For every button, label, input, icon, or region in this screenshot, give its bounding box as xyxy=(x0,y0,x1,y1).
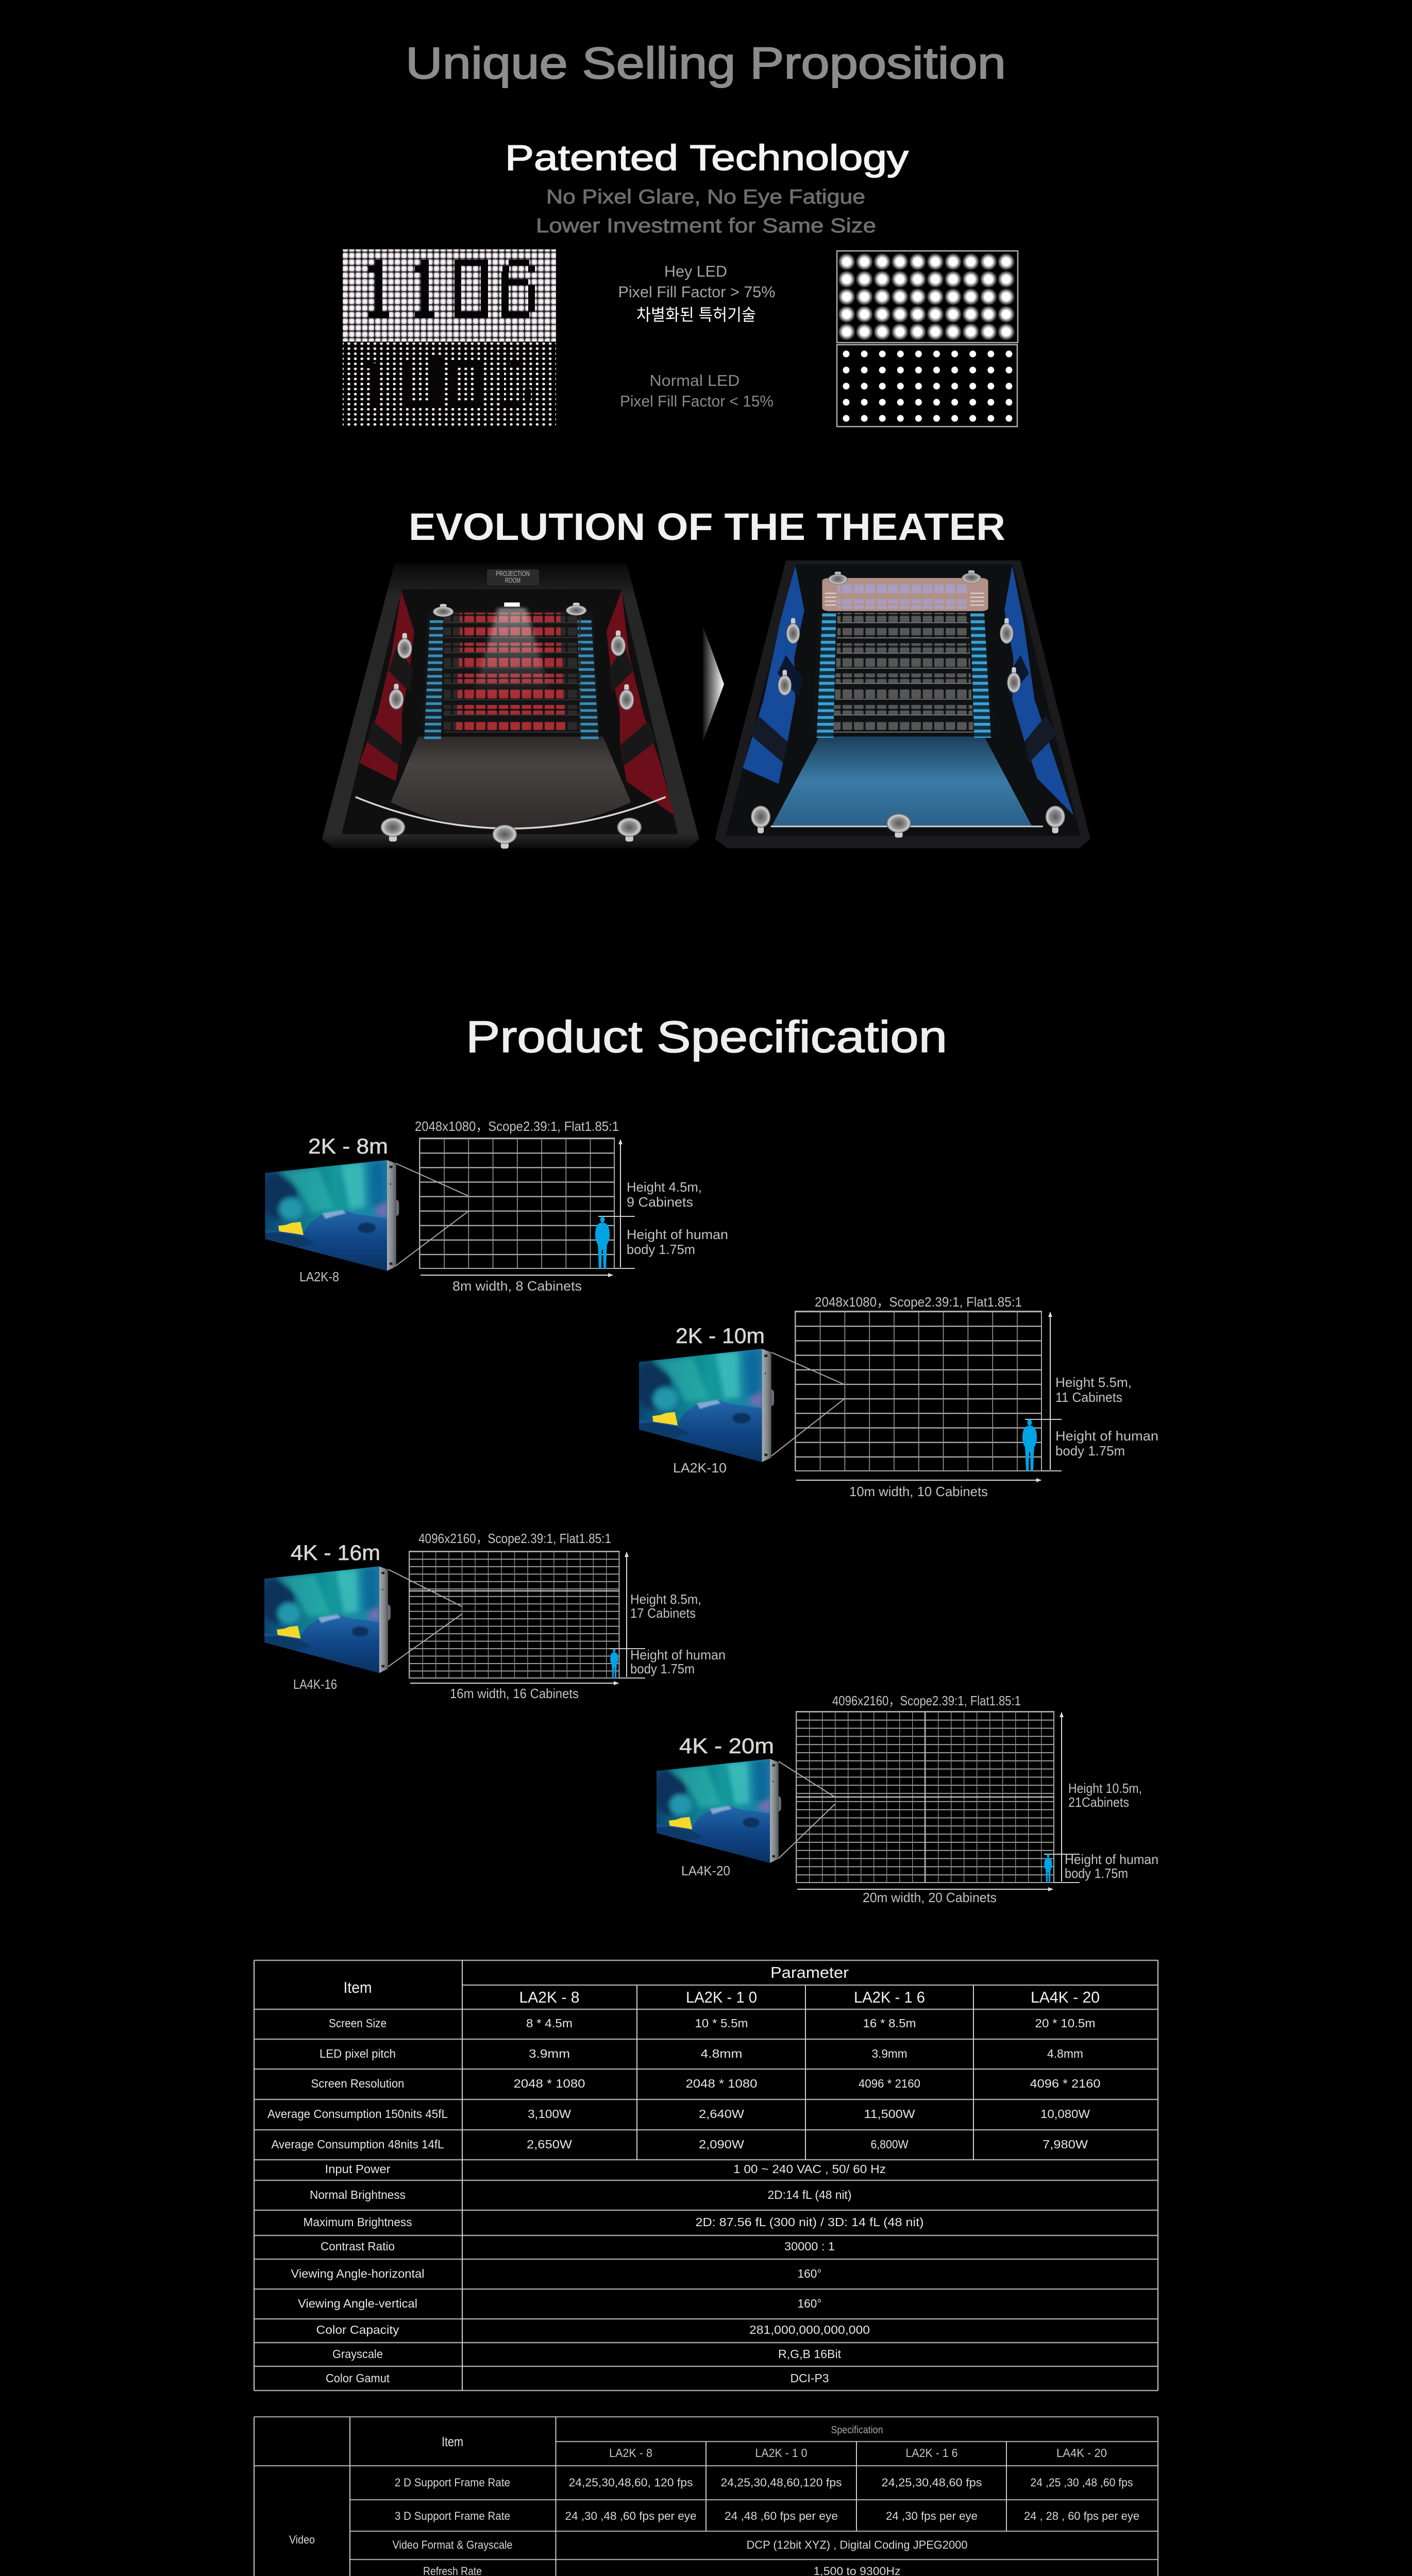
Normal LED caption: Normal LED xyxy=(649,371,740,389)
dimension labels: 10m width, 10 Cabinets xyxy=(849,1484,988,1499)
row: viewing angle horizontal: 160° xyxy=(798,2267,821,2280)
cabinet screen image xyxy=(260,1154,399,1278)
aisle steps xyxy=(817,613,836,738)
row: resolution: 2048 * 1080 xyxy=(513,2077,585,2090)
Hey LED caption: Hey LED xyxy=(664,262,727,280)
dimension labels: Height 10.5m, xyxy=(1068,1781,1142,1796)
projection room label: PROJECTION xyxy=(496,569,530,578)
seat rows xyxy=(833,613,973,732)
cabinet screen image xyxy=(634,1343,774,1469)
dimension labels: Height 8.5m, xyxy=(630,1591,701,1607)
row: consumption 150 nits xyxy=(267,2107,1090,2121)
pixel diagram: Normal LED xyxy=(837,345,1018,427)
row: consumption 150 nits: Average Consumption 150nits 45fL xyxy=(267,2107,448,2121)
curved screen xyxy=(356,797,666,828)
dimension labels: body 1.75m xyxy=(1055,1443,1125,1459)
projection room label: ROOM xyxy=(505,576,520,584)
row: consumption 48 nits xyxy=(271,2138,1088,2151)
table: parameter specification xyxy=(254,1960,1158,2391)
cabinet grid xyxy=(796,1711,1054,1883)
dimension labels xyxy=(681,1781,1158,1905)
row: screen size: 8 * 4.5m xyxy=(526,2016,573,2030)
spec diagram: 2K - 10m xyxy=(634,1294,1158,1499)
row: consumption 48 nits: Average Consumption 48nits 14fL xyxy=(271,2138,444,2151)
dimension labels: 11 Cabinets xyxy=(1055,1389,1122,1405)
model title: 2K - 10m xyxy=(676,1324,765,1348)
row: color capacity xyxy=(316,2323,870,2336)
row: refresh rate xyxy=(423,2565,901,2576)
row: viewing angle vertical: 160° xyxy=(798,2297,821,2310)
dimension labels: 8m width, 8 Cabinets xyxy=(452,1278,582,1294)
model title: 2K - 8m xyxy=(308,1134,388,1158)
row: 3D frame rate: 24 ,30 ,48 ,60 fps per eye xyxy=(565,2510,697,2522)
row: color gamut: DCI-P3 xyxy=(791,2371,829,2385)
row: consumption 48 nits: 2,650W xyxy=(527,2138,572,2151)
projector beam xyxy=(473,608,551,697)
cabinet screen image xyxy=(260,1561,391,1680)
row: screen size: 16 * 8.5m xyxy=(863,2016,916,2030)
row: consumption 150 nits: 11,500W xyxy=(864,2107,915,2121)
header row: LA2K - 1 6 xyxy=(906,2446,957,2460)
row: color capacity: 281,000,000,000,000 xyxy=(749,2323,870,2336)
speakers xyxy=(381,603,642,849)
dimension labels xyxy=(673,1375,1158,1499)
cabinet grid xyxy=(795,1311,1041,1471)
row: 3D frame rate: 24 ,48 ,60 fps per eye xyxy=(725,2510,838,2522)
resolution label: 2048x1080，Scope2.39:1, Flat1.85:1 xyxy=(815,1294,1022,1310)
Hey LED caption: 차별화된 특허기술 xyxy=(636,306,756,324)
row: viewing angle horizontal xyxy=(291,2267,821,2280)
dimension arrows xyxy=(410,1552,627,1683)
header row: Item xyxy=(442,2434,463,2449)
row: viewing angle horizontal: Viewing Angle-horizontal xyxy=(291,2267,425,2280)
dimension labels: Height 4.5m, xyxy=(627,1179,702,1195)
projection room label xyxy=(487,569,539,585)
dimension labels: body 1.75m xyxy=(627,1242,695,1257)
seating block xyxy=(811,613,995,734)
row: color capacity: Color Capacity xyxy=(316,2323,399,2336)
callout lines xyxy=(771,1352,845,1456)
table rules xyxy=(254,2417,1158,2576)
dimension arrows xyxy=(797,1713,1062,1889)
row: normal brightness: Normal Brightness xyxy=(310,2188,406,2201)
dimension labels: 9 Cabinets xyxy=(627,1194,693,1210)
title: Unique Selling Proposition: Unique Selling Proposition xyxy=(406,39,1006,88)
aisle steps xyxy=(424,620,443,739)
dimension labels xyxy=(299,1179,728,1294)
resolution label: 4096x2160，Scope2.39:1, Flat1.85:1 xyxy=(832,1693,1021,1708)
header row: LA2K - 1 6 xyxy=(854,1988,925,2006)
human figure xyxy=(1044,1854,1052,1883)
row: grayscale: R,G,B 16Bit xyxy=(778,2347,842,2361)
dimension labels: 16m width, 16 Cabinets xyxy=(450,1686,579,1701)
Hey LED caption xyxy=(618,262,775,324)
row: grayscale xyxy=(332,2347,842,2361)
digits on Hey LED panel xyxy=(368,260,535,318)
row: resolution: 4096 * 2160 xyxy=(859,2077,920,2090)
row: video format: Video Format & Grayscale xyxy=(393,2538,512,2551)
row: maximum brightness: Maximum Brightness xyxy=(303,2215,412,2229)
digits on Normal LED panel xyxy=(363,355,531,407)
spec diagram: 4K - 16m xyxy=(260,1531,726,1701)
LED photo comparison xyxy=(343,249,556,428)
row: resolution xyxy=(311,2077,1101,2090)
dimension labels: LA2K-8 xyxy=(299,1269,339,1284)
row: 2D frame rate: 24 ,25 ,30 ,48 ,60 fps xyxy=(1031,2476,1133,2489)
callout lines xyxy=(388,1569,462,1667)
row: screen size: 10 * 5.5m xyxy=(695,2016,748,2030)
callout lines xyxy=(396,1163,469,1266)
row: input power: Input Power xyxy=(325,2162,391,2176)
dimension arrows xyxy=(421,1140,620,1275)
row: pixel pitch: 4.8mm xyxy=(1047,2047,1083,2060)
row: resolution: Screen Resolution xyxy=(311,2077,404,2090)
header row xyxy=(343,1963,1100,2006)
dimension arrows xyxy=(796,1312,1050,1480)
model title: 4K - 16m xyxy=(291,1540,380,1565)
table rules xyxy=(254,1960,1158,2391)
human figure xyxy=(1022,1419,1037,1471)
row: consumption 48 nits: 7,980W xyxy=(1043,2138,1088,2151)
dimension labels: Height of human xyxy=(627,1227,728,1242)
cabinet grid xyxy=(409,1551,619,1678)
header row: LA4K - 20 xyxy=(1056,2446,1107,2460)
floor xyxy=(391,737,631,830)
row: resolution: 2048 * 1080 xyxy=(685,2077,758,2090)
seat rows xyxy=(444,613,581,732)
dimension labels: LA4K-20 xyxy=(681,1863,730,1878)
row: 3D frame rate: 24 , 28 , 60 fps per eye xyxy=(1024,2510,1139,2522)
row: resolution: 4096 * 2160 xyxy=(1030,2077,1101,2090)
row: consumption 48 nits: 2,090W xyxy=(699,2138,744,2151)
dimension labels: 20m width, 20 Cabinets xyxy=(863,1890,997,1905)
subheading: benefits: Lower Investment for Same Size xyxy=(536,215,876,237)
row: video format xyxy=(393,2538,968,2551)
resolution label: 2048x1080，Scope2.39:1, Flat1.85:1 xyxy=(415,1118,619,1134)
heading: Evolution of the theater: EVOLUTION OF THE THEATER xyxy=(409,505,1005,548)
row: viewing angle vertical xyxy=(298,2297,821,2310)
theater: projection layout xyxy=(322,563,699,849)
row: 3D frame rate: 3 D Support Frame Rate xyxy=(395,2510,510,2522)
cabinet screen image xyxy=(652,1753,781,1869)
projector xyxy=(504,602,520,607)
dimension labels: Height 5.5m, xyxy=(1055,1375,1132,1390)
spec diagram: 4K - 20m xyxy=(652,1693,1158,1905)
row: screen size xyxy=(329,2016,1096,2030)
header row: LA2K - 8 xyxy=(609,2446,652,2460)
spec diagram: 2K - 8m xyxy=(260,1118,728,1294)
LED screen highlight overlay xyxy=(822,578,988,611)
header row: LA2K - 1 0 xyxy=(686,1988,757,2006)
speakers xyxy=(751,570,1065,838)
row: pixel pitch: 3.9mm xyxy=(872,2047,907,2060)
dimension labels: LA2K-10 xyxy=(673,1460,727,1476)
row: 2D frame rate: 2 D Support Frame Rate xyxy=(395,2476,510,2489)
row: video format: DCP (12bit XYZ) , Digital Coding JPEG2000 xyxy=(746,2538,968,2551)
cabinet grid xyxy=(419,1138,614,1268)
row: 2D frame rate: 24,25,30,48,60 fps xyxy=(881,2476,982,2489)
resolution label: 4096x2160，Scope2.39:1, Flat1.85:1 xyxy=(418,1531,611,1546)
human reference lines xyxy=(610,1649,645,1678)
dimension labels: Height of human xyxy=(1055,1428,1158,1444)
row: screen size: 20 * 10.5m xyxy=(1035,2016,1096,2030)
callout lines xyxy=(779,1761,835,1858)
subheading: benefits xyxy=(536,186,876,237)
row: 2D frame rate xyxy=(395,2476,1133,2489)
row: consumption 150 nits: 10,080W xyxy=(1040,2107,1090,2121)
row: 2D frame rate: 24,25,30,48,60,120 fps xyxy=(720,2476,842,2489)
human reference lines xyxy=(1044,1854,1080,1883)
dimension labels xyxy=(293,1591,726,1701)
row: consumption 48 nits: 6,800W xyxy=(871,2138,909,2151)
header row: Parameter xyxy=(770,1963,849,1981)
row: maximum brightness xyxy=(303,2215,923,2229)
Normal LED caption xyxy=(620,371,774,410)
dimension labels: Height of human xyxy=(630,1647,726,1663)
seating block xyxy=(423,611,600,731)
theater: LED layout xyxy=(715,561,1090,848)
human figure xyxy=(610,1649,618,1678)
row: pixel pitch xyxy=(320,2047,1083,2060)
row: pixel pitch: LED pixel pitch xyxy=(320,2047,396,2060)
header row: Item xyxy=(343,1978,372,1996)
header row: LA2K - 8 xyxy=(519,1988,579,2006)
row: color gamut: Color Gamut xyxy=(326,2371,390,2385)
red curtains xyxy=(359,590,674,816)
arrow between theaters xyxy=(703,626,724,742)
human reference lines xyxy=(1025,1419,1062,1471)
Hey LED caption: Pixel Fill Factor > 75% xyxy=(618,283,775,301)
row: grayscale: Grayscale xyxy=(332,2347,383,2361)
row: 3D frame rate xyxy=(395,2510,1139,2522)
Normal LED caption: Pixel Fill Factor < 15% xyxy=(620,392,774,410)
heading: Patented Technology: Patented Technology xyxy=(505,138,909,178)
dimension labels: 21Cabinets xyxy=(1068,1794,1129,1810)
blue floor xyxy=(772,737,1032,826)
human reference lines xyxy=(598,1216,635,1268)
header row: Specification xyxy=(831,2425,883,2436)
dimension labels: body 1.75m xyxy=(630,1661,695,1676)
header row xyxy=(442,2425,1107,2460)
header row: LA2K - 1 0 xyxy=(755,2446,807,2460)
row: 3D frame rate: 24 ,30 fps per eye xyxy=(886,2510,978,2522)
dimension labels: 17 Cabinets xyxy=(630,1605,696,1621)
row: input power: 1 00 ~ 240 VAC , 50/ 60 Hz xyxy=(733,2162,886,2176)
dimension labels: Height of human xyxy=(1065,1852,1158,1867)
row: contrast ratio: 30000 : 1 xyxy=(784,2240,835,2253)
human figure xyxy=(595,1216,610,1268)
table: detailed specification xyxy=(254,2417,1158,2576)
row: normal brightness: 2D:14 fL (48 nit) xyxy=(768,2188,851,2201)
row: color gamut xyxy=(326,2371,829,2385)
blue curtains xyxy=(743,566,1074,816)
group label: video: Video xyxy=(289,2533,315,2546)
row: maximum brightness: 2D: 87.56 fL (300 nit) / 3D: 14 fL (48 nit) xyxy=(696,2215,923,2229)
row: 2D frame rate: 24,25,30,48,60, 120 fps xyxy=(569,2476,693,2489)
row: contrast ratio: Contrast Ratio xyxy=(321,2240,395,2253)
row: input power xyxy=(325,2162,886,2176)
row: pixel pitch: 4.8mm xyxy=(701,2047,742,2060)
row: contrast ratio xyxy=(321,2240,835,2253)
header row: LA4K - 20 xyxy=(1031,1988,1100,2006)
row: screen size: Screen Size xyxy=(329,2016,386,2030)
pixel diagram: Hey LED xyxy=(837,251,1018,343)
subheading: benefits: No Pixel Glare, No Eye Fatigue xyxy=(546,186,865,208)
row: consumption 150 nits: 3,100W xyxy=(528,2107,571,2121)
row: consumption 150 nits: 2,640W xyxy=(699,2107,744,2121)
row: pixel pitch: 3.9mm xyxy=(529,2047,570,2060)
row: normal brightness xyxy=(310,2188,851,2201)
heading: Product Specification: Product Specification xyxy=(466,1012,947,1062)
row: viewing angle vertical: Viewing Angle-vertical xyxy=(298,2297,417,2310)
flat screen xyxy=(771,826,1043,827)
model title: 4K - 20m xyxy=(679,1734,774,1758)
dimension labels: LA4K-16 xyxy=(293,1676,337,1692)
dimension labels: body 1.75m xyxy=(1065,1866,1128,1881)
